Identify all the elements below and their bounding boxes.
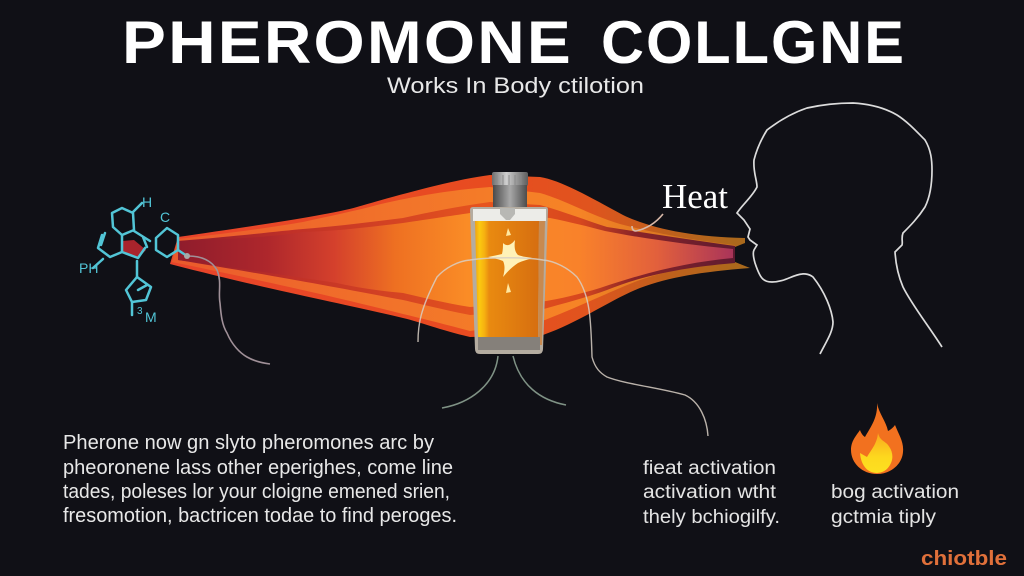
title: PHEROMONE xyxy=(122,9,573,76)
title: COLLGNE xyxy=(601,9,906,76)
perfume bottle xyxy=(470,172,548,354)
logo text: chiotble xyxy=(921,548,1007,570)
heat pointer xyxy=(632,214,663,231)
connector to beam xyxy=(178,250,187,256)
molecule labels: M xyxy=(145,309,157,325)
molecule labels xyxy=(79,194,170,325)
bottle right glass xyxy=(538,221,545,345)
curved connector left xyxy=(188,256,270,364)
text block middle: fieat activation xyxy=(643,458,776,479)
molecule diagram xyxy=(93,203,187,315)
arcs around bottle xyxy=(418,258,708,436)
bottle nozzle xyxy=(500,208,515,220)
drips xyxy=(506,228,511,293)
text block middle: activation wtht xyxy=(643,482,777,503)
bond down to pentagon xyxy=(136,261,138,277)
text block left: fresomotion, bactricen todae to find peroges. xyxy=(63,505,457,527)
bottle neck xyxy=(493,185,527,207)
title xyxy=(122,9,906,76)
molecule ring red fill xyxy=(123,240,146,258)
bond to H xyxy=(133,203,142,212)
molecule labels: H xyxy=(142,194,152,210)
text block middle xyxy=(643,458,780,528)
bond to PH xyxy=(93,259,103,268)
bottle liquid xyxy=(475,221,539,337)
text block left: tades, poleses lor your cloigne emened srien, xyxy=(63,481,450,503)
lower stems xyxy=(442,356,566,408)
bottle base xyxy=(478,337,540,350)
glow star xyxy=(488,240,532,277)
cap ribs xyxy=(497,175,521,185)
text block left xyxy=(63,432,457,527)
molecule labels: 3 xyxy=(137,306,143,317)
molecule labels: C xyxy=(160,209,170,225)
subtitle: Works In Body ctilotion xyxy=(387,73,644,98)
bottle body xyxy=(470,207,548,354)
beam lighter band xyxy=(172,187,735,331)
pentagon ring xyxy=(126,277,151,302)
text block left: pheoronene lass other eperighes, come line xyxy=(63,457,453,479)
label: Heat: Heat xyxy=(662,177,728,216)
ring top xyxy=(112,208,134,235)
text block right xyxy=(831,482,959,528)
flame outer xyxy=(851,403,903,474)
heat beam xyxy=(123,175,750,337)
flame inner xyxy=(860,433,892,473)
ring centre xyxy=(122,231,150,258)
text block left: Pherone now gn slyto pheromones arc by xyxy=(63,432,434,454)
bottle cap xyxy=(492,172,528,186)
beam outer band xyxy=(170,175,750,337)
text block right: bog activation xyxy=(831,482,959,503)
connector node xyxy=(184,253,190,259)
icon: flame xyxy=(851,403,903,474)
bottle shoulder xyxy=(473,209,546,221)
text block right: gctmia tiply xyxy=(831,507,937,528)
beam inner core xyxy=(178,213,733,307)
ring right xyxy=(156,228,178,257)
ring left chain xyxy=(98,233,122,257)
head outline xyxy=(737,103,942,354)
text block middle: thely bchiogilfy. xyxy=(643,507,780,528)
molecule labels: PH xyxy=(79,260,98,276)
beam darker streak xyxy=(178,202,735,315)
